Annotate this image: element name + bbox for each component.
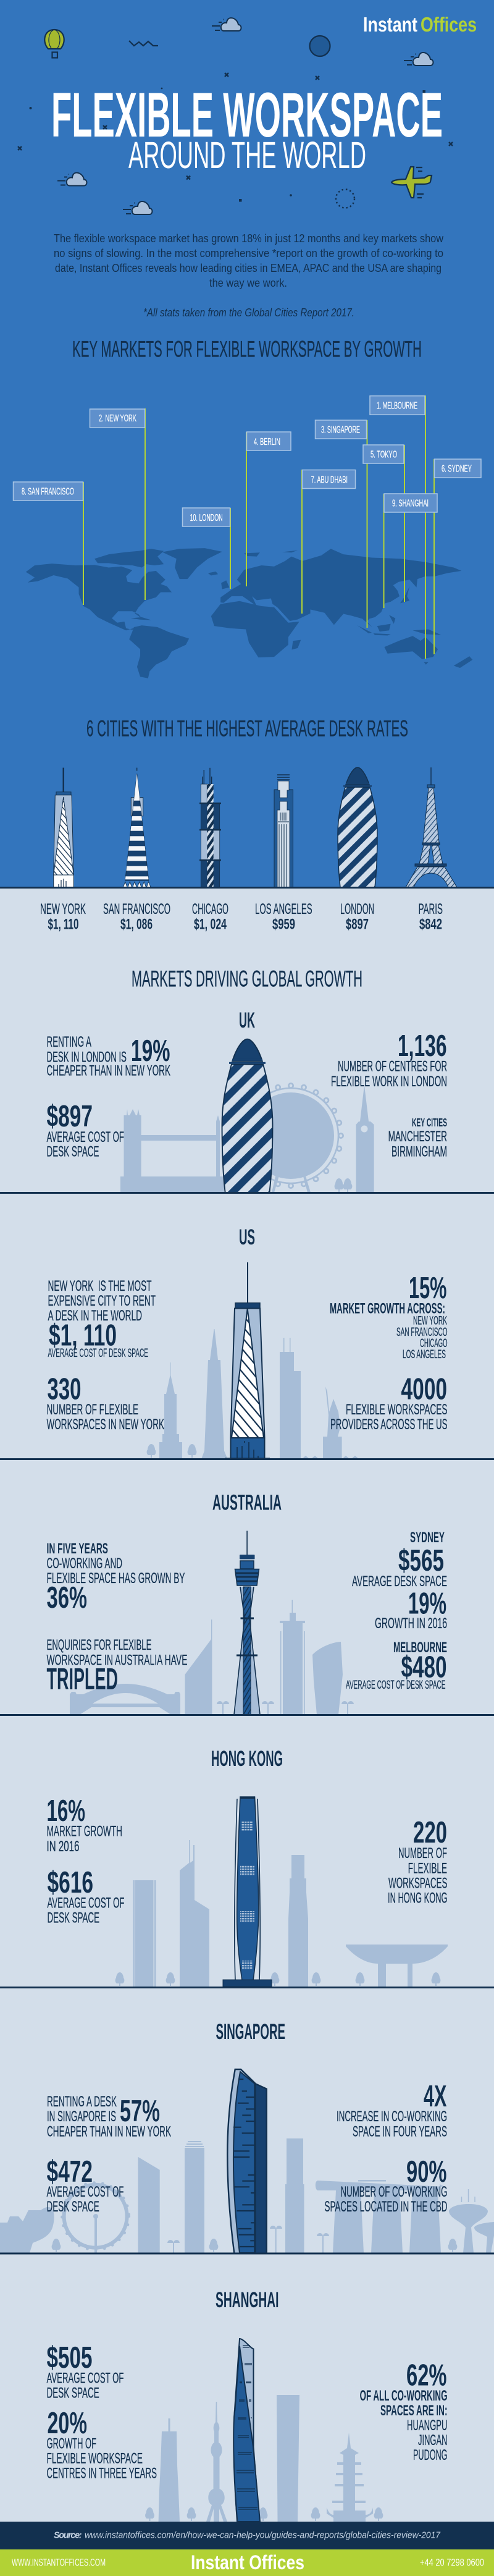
logo: footer Instant Offices: Instant Offices (191, 2551, 304, 2574)
text: UK left stats (47, 1034, 170, 1160)
text: Singapore left stats: RENTING A DESK (47, 2093, 117, 2110)
text: source line: www.instantoffices.com/en/how-we-can-help-you/guides-and-reports/global-cities-review-2017 (85, 2530, 441, 2541)
icon: dotted circle (336, 189, 354, 208)
flag: 1 Melbourne (370, 395, 426, 659)
flag: 6 Sydney: 6. SYDNEY (442, 464, 472, 475)
text: Singapore left stats: AVERAGE COST OF (47, 2184, 124, 2200)
panel: UK (0, 1008, 494, 1194)
text: Australia left stats: IN FIVE YEARS (47, 1540, 108, 1557)
text: Australia right stats: $480 (401, 1651, 447, 1684)
text block: intro: The flexible workspace market has grown 18% in just 12 months and key markets show (54, 232, 444, 245)
text: Singapore left stats: IN SINGAPORE IS (47, 2108, 116, 2125)
text: Hong Kong left stats: MARKET GROWTH (47, 1823, 122, 1840)
icon: cloud top (212, 18, 241, 31)
flag: 1 Melbourne: 1. MELBOURNE (377, 400, 417, 411)
text: US left stats: NUMBER OF FLEXIBLE (47, 1401, 138, 1418)
text: Australia right stats: SYDNEY (410, 1529, 445, 1546)
text: US right stats: SAN FRANCISCO (396, 1326, 447, 1339)
text: Singapore left stats: CHEAPER THAN IN NEW YORK (47, 2124, 171, 2140)
text: UK right stats: MANCHESTER (388, 1128, 447, 1145)
text: US left stats: 330 (47, 1373, 82, 1406)
flag: 7 Abu Dhabi (301, 470, 356, 614)
text: Hong Kong right stats: WORKSPACES (388, 1875, 447, 1892)
skyline: London silhouettes (120, 1085, 374, 1193)
text: source line: Source: (54, 2531, 82, 2541)
icon: Wilshire Grand tower (274, 775, 293, 887)
divider: UK ground (0, 1192, 494, 1194)
heading: UK: UK (239, 1008, 255, 1033)
text: US left stats: EXPENSIVE CITY TO RENT (48, 1293, 156, 1309)
text: city desk rates: LOS ANGELES (255, 901, 312, 918)
text: Hong Kong left stats: 16% (47, 1794, 85, 1828)
text: Australia left stats: FLEXIBLE SPACE HAS GROWN BY (47, 1570, 185, 1587)
flag: 9 Shanghai (383, 494, 437, 608)
text: US left stats (47, 1278, 164, 1433)
text: city desk rates (40, 901, 443, 933)
icon: zigzag (129, 41, 158, 46)
text: Hong Kong left stats: IN 2016 (47, 1838, 79, 1855)
text: Hong Kong right stats (388, 1816, 447, 1907)
text: Shanghai right stats (360, 2359, 447, 2464)
text: Singapore right stats: 4X (424, 2080, 447, 2113)
flag: 8 San Francisco: 8. SAN FRANCISCO (22, 487, 74, 497)
icon: Gherkin (338, 767, 377, 887)
icon: cloud lower (123, 201, 152, 214)
text: city desk rates: $1, 110 (48, 916, 79, 933)
text: Shanghai left stats: FLEXIBLE WORKSPACE (47, 2451, 143, 2467)
text: Shanghai left stats: $505 (47, 2341, 93, 2375)
text: Hong Kong right stats: NUMBER OF (398, 1845, 447, 1862)
flag: 4 Berlin (246, 432, 291, 586)
heading: Singapore: SINGAPORE (216, 2020, 285, 2044)
text: US right stats: LOS ANGELES (403, 1348, 446, 1361)
text: Australia left stats: ENQUIRIES FOR FLEXIBLE (47, 1637, 151, 1653)
text: US right stats: CHICAGO (420, 1337, 447, 1350)
text: Singapore left stats: DESK SPACE (47, 2198, 99, 2215)
text: Hong Kong right stats: FLEXIBLE (408, 1860, 447, 1877)
skyline: Singapore silhouettes (0, 2139, 494, 2253)
text: city desk rates: $1, 024 (194, 916, 227, 933)
skyline: Sydney silhouettes (70, 1600, 354, 1715)
heading: Australia: AUSTRALIA (212, 1491, 282, 1515)
panel: Shanghai (47, 2288, 447, 2522)
heading: US: US (239, 1225, 255, 1249)
flag: 9 Shanghai: 9. SHANGHAI (392, 499, 429, 509)
divider: ground line city row (0, 887, 494, 889)
text: city desk rates: $842 (419, 916, 442, 933)
text: US left stats: WORKSPACES IN NEW YORK (47, 1416, 164, 1433)
divider: Australia ground (0, 1714, 494, 1716)
divider: Hong Kong ground (0, 1987, 494, 1988)
text: city desk rates: CHICAGO (192, 901, 228, 918)
text: US right stats: NEW YORK (413, 1315, 447, 1328)
text: Singapore left stats: $472 (47, 2155, 93, 2189)
icon: cloud left (57, 173, 86, 185)
text: city desk rates: $959 (272, 916, 295, 933)
text: US right stats: 15% (409, 1272, 447, 1305)
text: Hong Kong left stats (47, 1794, 125, 1927)
text: city desk rates: $1, 086 (120, 916, 153, 933)
text: Singapore right stats: 90% (406, 2155, 447, 2189)
text: Australia right stats: $565 (398, 1544, 444, 1577)
text: US left stats: AVERAGE COST OF DESK SPACE (48, 1347, 148, 1360)
chart: world map (26, 548, 472, 678)
icon: cloud right (404, 53, 433, 65)
panel: Singapore (0, 2020, 494, 2254)
text: Shanghai left stats: 20% (47, 2407, 87, 2440)
icon: One World Trade tower (54, 768, 73, 887)
panel: source band (0, 2522, 494, 2549)
text: Hong Kong left stats: DESK SPACE (47, 1910, 99, 1927)
text: Australia left stats: TRIPLED (47, 1663, 118, 1696)
text: Shanghai right stats: 62% (406, 2359, 447, 2392)
text: US left stats: A DESK IN THE WORLD (48, 1307, 142, 1324)
icon: round moon (310, 36, 330, 56)
text: UK left stats: DESK SPACE (47, 1143, 99, 1160)
text: Singapore left stats: 57% (120, 2095, 160, 2128)
text: UK left stats: DESK IN LONDON IS (47, 1049, 127, 1066)
icon: Eiffel tower (406, 767, 457, 887)
icon: Shanghai tower (233, 2339, 260, 2522)
skyline: Shanghai silhouettes (145, 2395, 383, 2522)
text: Shanghai left stats: CENTRES IN THREE YEARS (47, 2465, 157, 2482)
flag: 2 New York (90, 408, 146, 600)
text: Shanghai left stats: DESK SPACE (47, 2385, 99, 2402)
panel: key markets map (14, 336, 481, 678)
icon: Hong Kong ICC tower (223, 1797, 272, 1987)
divider: US ground (0, 1458, 494, 1460)
icon: hot air balloon (44, 30, 64, 58)
text: Singapore left stats (47, 2093, 171, 2215)
logo: Instant Offices: Instant (363, 13, 417, 36)
text: UK right stats (331, 1029, 447, 1160)
flag: 10 London: 10. LONDON (190, 513, 223, 523)
text: Hong Kong left stats: AVERAGE COST OF (47, 1895, 125, 1912)
logo: Instant Offices (363, 13, 477, 36)
panel: blue header background (0, 0, 494, 888)
divider: Singapore ground (0, 2253, 494, 2254)
text: Australia right stats: 19% (408, 1587, 446, 1620)
text: Australia left stats: CO-WORKING AND (47, 1555, 122, 1572)
text: UK right stats: BIRMINGHAM (391, 1143, 447, 1160)
text block: intro (54, 232, 444, 319)
icon: Willis tower (199, 768, 221, 887)
text: city desk rates: PARIS (419, 901, 443, 918)
panel: hero header (18, 13, 477, 319)
panel: green footer (0, 2549, 494, 2576)
text block: intro: no signs of slowing. In the most comprehensive *report on the growth of co-working to (54, 247, 443, 260)
text: Australia right stats (346, 1529, 447, 1692)
text: Shanghai left stats: AVERAGE COST OF (47, 2370, 124, 2387)
text: UK right stats: 1,136 (398, 1029, 447, 1063)
text: Shanghai left stats: GROWTH OF (47, 2436, 96, 2452)
panel: Hong Kong (0, 1747, 494, 1988)
text: Hong Kong left stats: $616 (47, 1866, 93, 1899)
icon: Transamerica pyramid (124, 767, 151, 887)
logo: Instant Offices: Offices (421, 13, 477, 36)
skyline: Hong Kong silhouettes (115, 1840, 448, 1987)
text: Hong Kong right stats: 220 (413, 1816, 447, 1849)
panel: light lower background (0, 888, 494, 2576)
text: UK right stats: KEY CITIES (412, 1117, 447, 1129)
flag: 2 New York: 2. NEW YORK (99, 413, 136, 424)
flag: 5 Tokyo: 5. TOKYO (371, 450, 397, 460)
text: Australia left stats: 36% (47, 1581, 87, 1615)
icon: Sydney tower (234, 1531, 260, 1715)
text: website: WWW.INSTANTOFFICES.COM (12, 2557, 106, 2569)
text: Shanghai left stats (47, 2341, 157, 2482)
flag: 5 Tokyo (363, 445, 405, 602)
heading: Shanghai: SHANGHAI (216, 2288, 279, 2312)
text: US left stats: $1, 110 (49, 1319, 117, 1352)
text: US left stats: NEW YORK IS THE MOST (48, 1278, 152, 1294)
icon: aeroplane (391, 167, 432, 198)
text block: intro: the way we work. (209, 276, 287, 289)
flag: 3 Singapore: 3. SINGAPORE (321, 425, 360, 436)
flag: 3 Singapore (315, 420, 368, 628)
text block: intro: *All stats taken from the Global Cities Report 2017. (143, 306, 354, 319)
text: Australia left stats (47, 1540, 188, 1696)
text: US right stats (330, 1272, 447, 1433)
text: Singapore right stats (325, 2080, 447, 2215)
flag: 7 Abu Dhabi: 7. ABU DHABI (311, 475, 348, 485)
text: Shanghai right stats: HUANGPU (407, 2417, 447, 2434)
text: UK left stats: CHEAPER THAN IN NEW YORK (47, 1063, 170, 1079)
flag: 6 Sydney (433, 459, 481, 654)
text: Australia left stats: WORKSPACE IN AUSTRALIA HAVE (47, 1652, 188, 1669)
text: UK left stats: RENTING A (47, 1034, 91, 1050)
text: city desk rates: SAN FRANCISCO (103, 901, 170, 918)
text: UK left stats: AVERAGE COST OF (47, 1129, 124, 1146)
flag: 8 San Francisco (14, 482, 84, 605)
text: UK left stats: $897 (47, 1100, 93, 1133)
text: Shanghai right stats: PUDONG (413, 2447, 447, 2464)
text: US right stats: 4000 (401, 1373, 447, 1406)
flag: 10 London (183, 508, 231, 589)
flag: 4 Berlin: 4. BERLIN (254, 437, 280, 447)
text: city desk rates: $897 (346, 916, 369, 933)
text: UK left stats: 19% (131, 1034, 170, 1068)
panel: US (0, 1225, 494, 1460)
text: Shanghai right stats: JINGAN (418, 2432, 447, 2449)
text: city desk rates: NEW YORK (40, 901, 86, 918)
text block: intro: date, Instant Offices reveals how leading cities in EMEA, APAC and the USA are shaping (55, 261, 442, 274)
icon: scattered stars (18, 73, 453, 201)
panel: highest desk rates (40, 716, 457, 933)
skyline: US silhouettes (147, 1329, 358, 1458)
panel: Australia (0, 1491, 494, 1716)
icon: Singapore tower (227, 2069, 267, 2253)
heading: Hong Kong: HONG KONG (211, 1747, 283, 1771)
icon: One World Trade tower large (225, 1262, 270, 1458)
title (51, 80, 443, 176)
text: Australia right stats: MELBOURNE (393, 1639, 447, 1656)
icon: Gherkin large (222, 1039, 272, 1193)
text: city desk rates: LONDON (340, 901, 374, 918)
